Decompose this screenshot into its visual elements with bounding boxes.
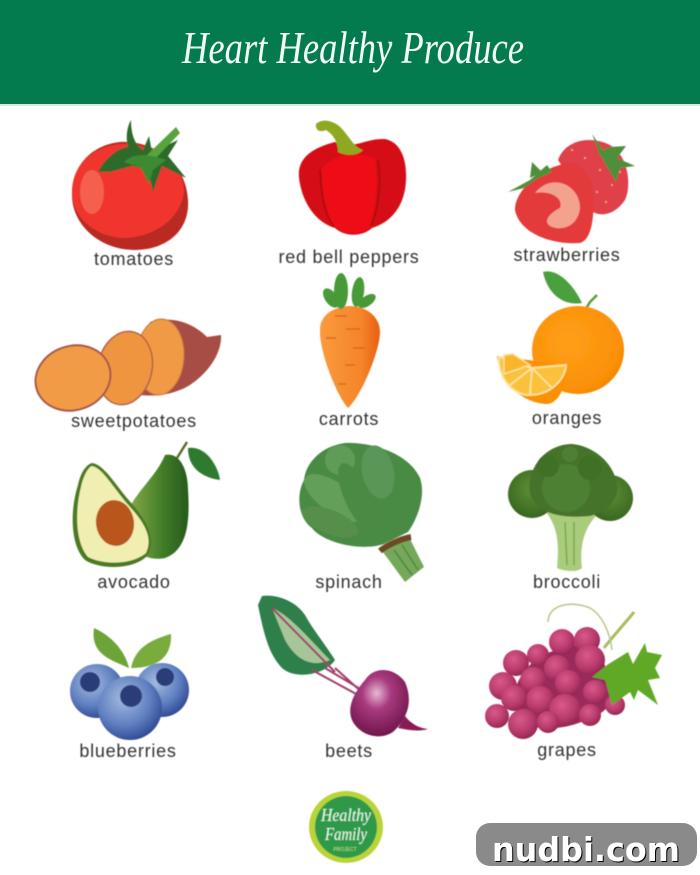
icon: sweet potato [27, 317, 221, 420]
logo: Healthy [320, 805, 371, 825]
label: grapes [537, 740, 597, 760]
label: blueberries [79, 741, 177, 761]
label: carrots [319, 409, 379, 429]
label: broccoli [533, 572, 601, 592]
icon: pepper [299, 121, 406, 235]
logo [309, 791, 383, 863]
label: strawberries [513, 245, 621, 265]
watermark: nudbi.com [492, 830, 680, 869]
icon: beet [258, 596, 428, 736]
logo: Family [324, 824, 367, 844]
item: spinach [297, 442, 424, 592]
icon: spinach [297, 442, 424, 582]
icon: grapes [485, 604, 662, 739]
label: oranges [532, 408, 602, 428]
icon: avocado [73, 442, 220, 567]
icon: tomato [72, 120, 188, 250]
label: sweetpotatoes [71, 411, 197, 431]
icon: carrot [320, 273, 380, 408]
item: blueberries [70, 628, 189, 761]
logo: PROJECT [333, 847, 357, 853]
icon: orange [497, 271, 624, 404]
header band [0, 0, 700, 106]
icon: blueberries [70, 628, 189, 740]
label: red bell peppers [278, 247, 420, 267]
item: grapes [485, 604, 662, 760]
item: carrots [319, 273, 380, 429]
item: sweet potatoes [27, 317, 221, 431]
label: tomatoes [94, 249, 174, 269]
item: broccoli [508, 444, 633, 592]
label: avocado [97, 572, 171, 592]
item: tomatoes [72, 120, 188, 269]
label: spinach [315, 572, 383, 592]
item: strawberries [508, 134, 635, 265]
label: beets [325, 741, 373, 761]
watermark: nudbi.com [493, 831, 681, 870]
title: Heart Healthy Produce [181, 22, 524, 73]
icon: broccoli [508, 444, 633, 571]
item: red bell peppers [278, 121, 420, 267]
item: beets [258, 596, 428, 761]
icon: strawberries [508, 134, 635, 243]
item: avocado [73, 442, 220, 592]
item: oranges [497, 271, 624, 428]
